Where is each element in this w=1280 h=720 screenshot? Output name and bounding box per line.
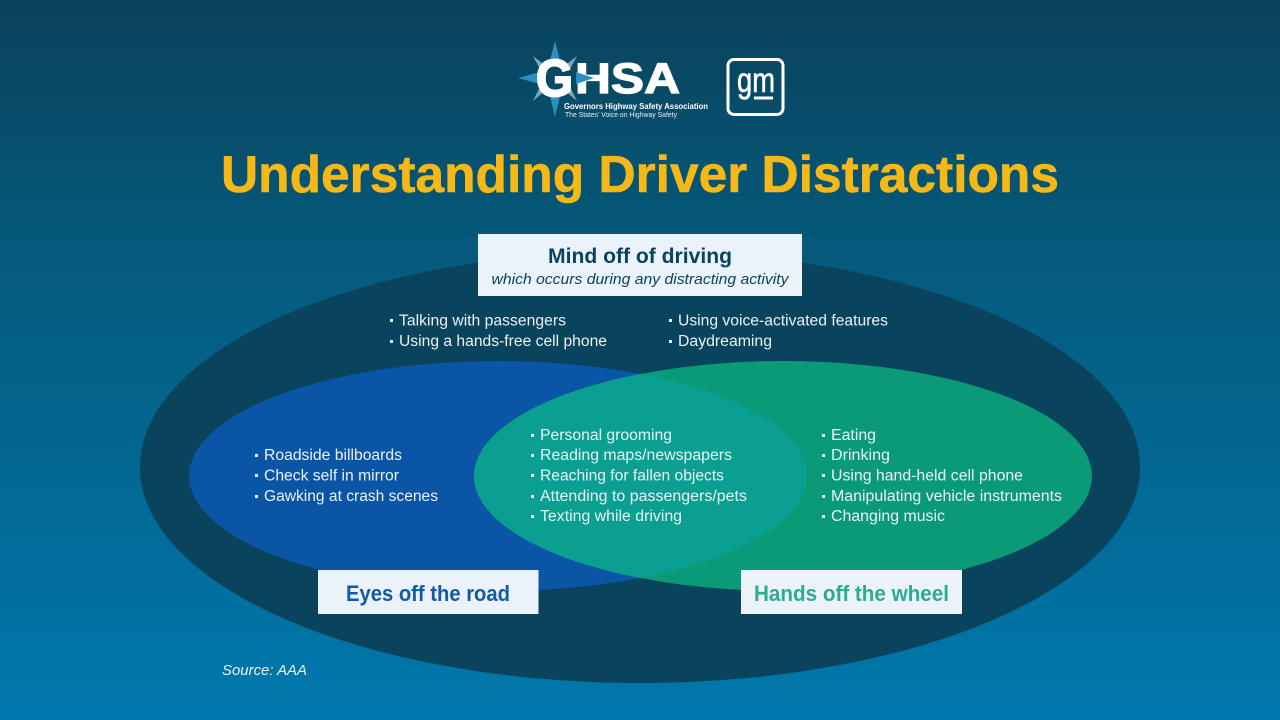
list: eyes off: Roadside billboards — [264, 447, 402, 464]
ellipse overlap — [474, 374, 807, 578]
ellipse: eyes off the road — [189, 361, 807, 591]
label subheading: which occurs during any distracting activity — [492, 271, 790, 288]
list: overlap: Texting while driving — [540, 508, 682, 525]
GHSA tagline: The States' Voice on Highway Safety — [565, 110, 677, 119]
list: mind off, left column — [390, 312, 607, 350]
icon: right star point — [576, 72, 594, 84]
list: eyes off — [255, 447, 438, 505]
ellipse: mind off of driving — [140, 251, 1140, 683]
list: hands off: Changing music — [831, 508, 945, 525]
list: hands off — [822, 427, 1062, 525]
list: mind off, right column — [669, 312, 888, 350]
list: hands off: Using hand-held cell phone — [831, 468, 1023, 484]
GHSA wordmark: HSA — [575, 55, 680, 103]
ellipse: hands off the wheel — [474, 361, 1092, 591]
GHSA name: Governors Highway Safety Association — [564, 102, 708, 111]
title: Understanding Driver Distractions — [221, 146, 1059, 204]
list: hands off: Manipulating vehicle instruments — [831, 488, 1062, 505]
GHSA wordmark — [536, 50, 680, 108]
list: hands off: Drinking — [831, 447, 890, 464]
list: mind off, right column: Daydreaming — [678, 333, 772, 350]
list: overlap: Attending to passengers/pets — [540, 488, 747, 505]
list: overlap: Reaching for fallen objects — [540, 468, 724, 484]
list: overlap — [531, 427, 747, 525]
label: hands off the wheel: Hands off the wheel — [754, 581, 949, 606]
list: mind off, left column: Using a hands-free cell phone — [399, 333, 607, 350]
label: mind off of driving — [478, 234, 802, 296]
list: hands off: Eating — [831, 427, 876, 444]
list: mind off, left column: Talking with passengers — [399, 312, 566, 330]
source note: Source: AAA — [222, 663, 307, 679]
list: eyes off: Gawking at crash scenes — [264, 488, 438, 505]
label: eyes off the road: Eyes off the road — [346, 581, 510, 606]
list: overlap: Reading maps/newspapers — [540, 447, 732, 464]
venn diagram — [140, 251, 1140, 683]
icon: compass star — [518, 41, 577, 117]
list: mind off, right column: Using voice-activated features — [678, 312, 888, 330]
label: hands off the wheel — [741, 570, 962, 614]
label: eyes off the road — [318, 570, 538, 614]
GHSA wordmark: G — [536, 50, 573, 108]
logo: GM: gm — [737, 61, 775, 100]
logo: GHSA — [518, 41, 708, 119]
list: overlap: Personal grooming — [540, 427, 672, 444]
label heading: Mind off of driving — [548, 245, 732, 268]
list: eyes off: Check self in mirror — [264, 468, 399, 484]
logo: GM — [728, 60, 783, 114]
